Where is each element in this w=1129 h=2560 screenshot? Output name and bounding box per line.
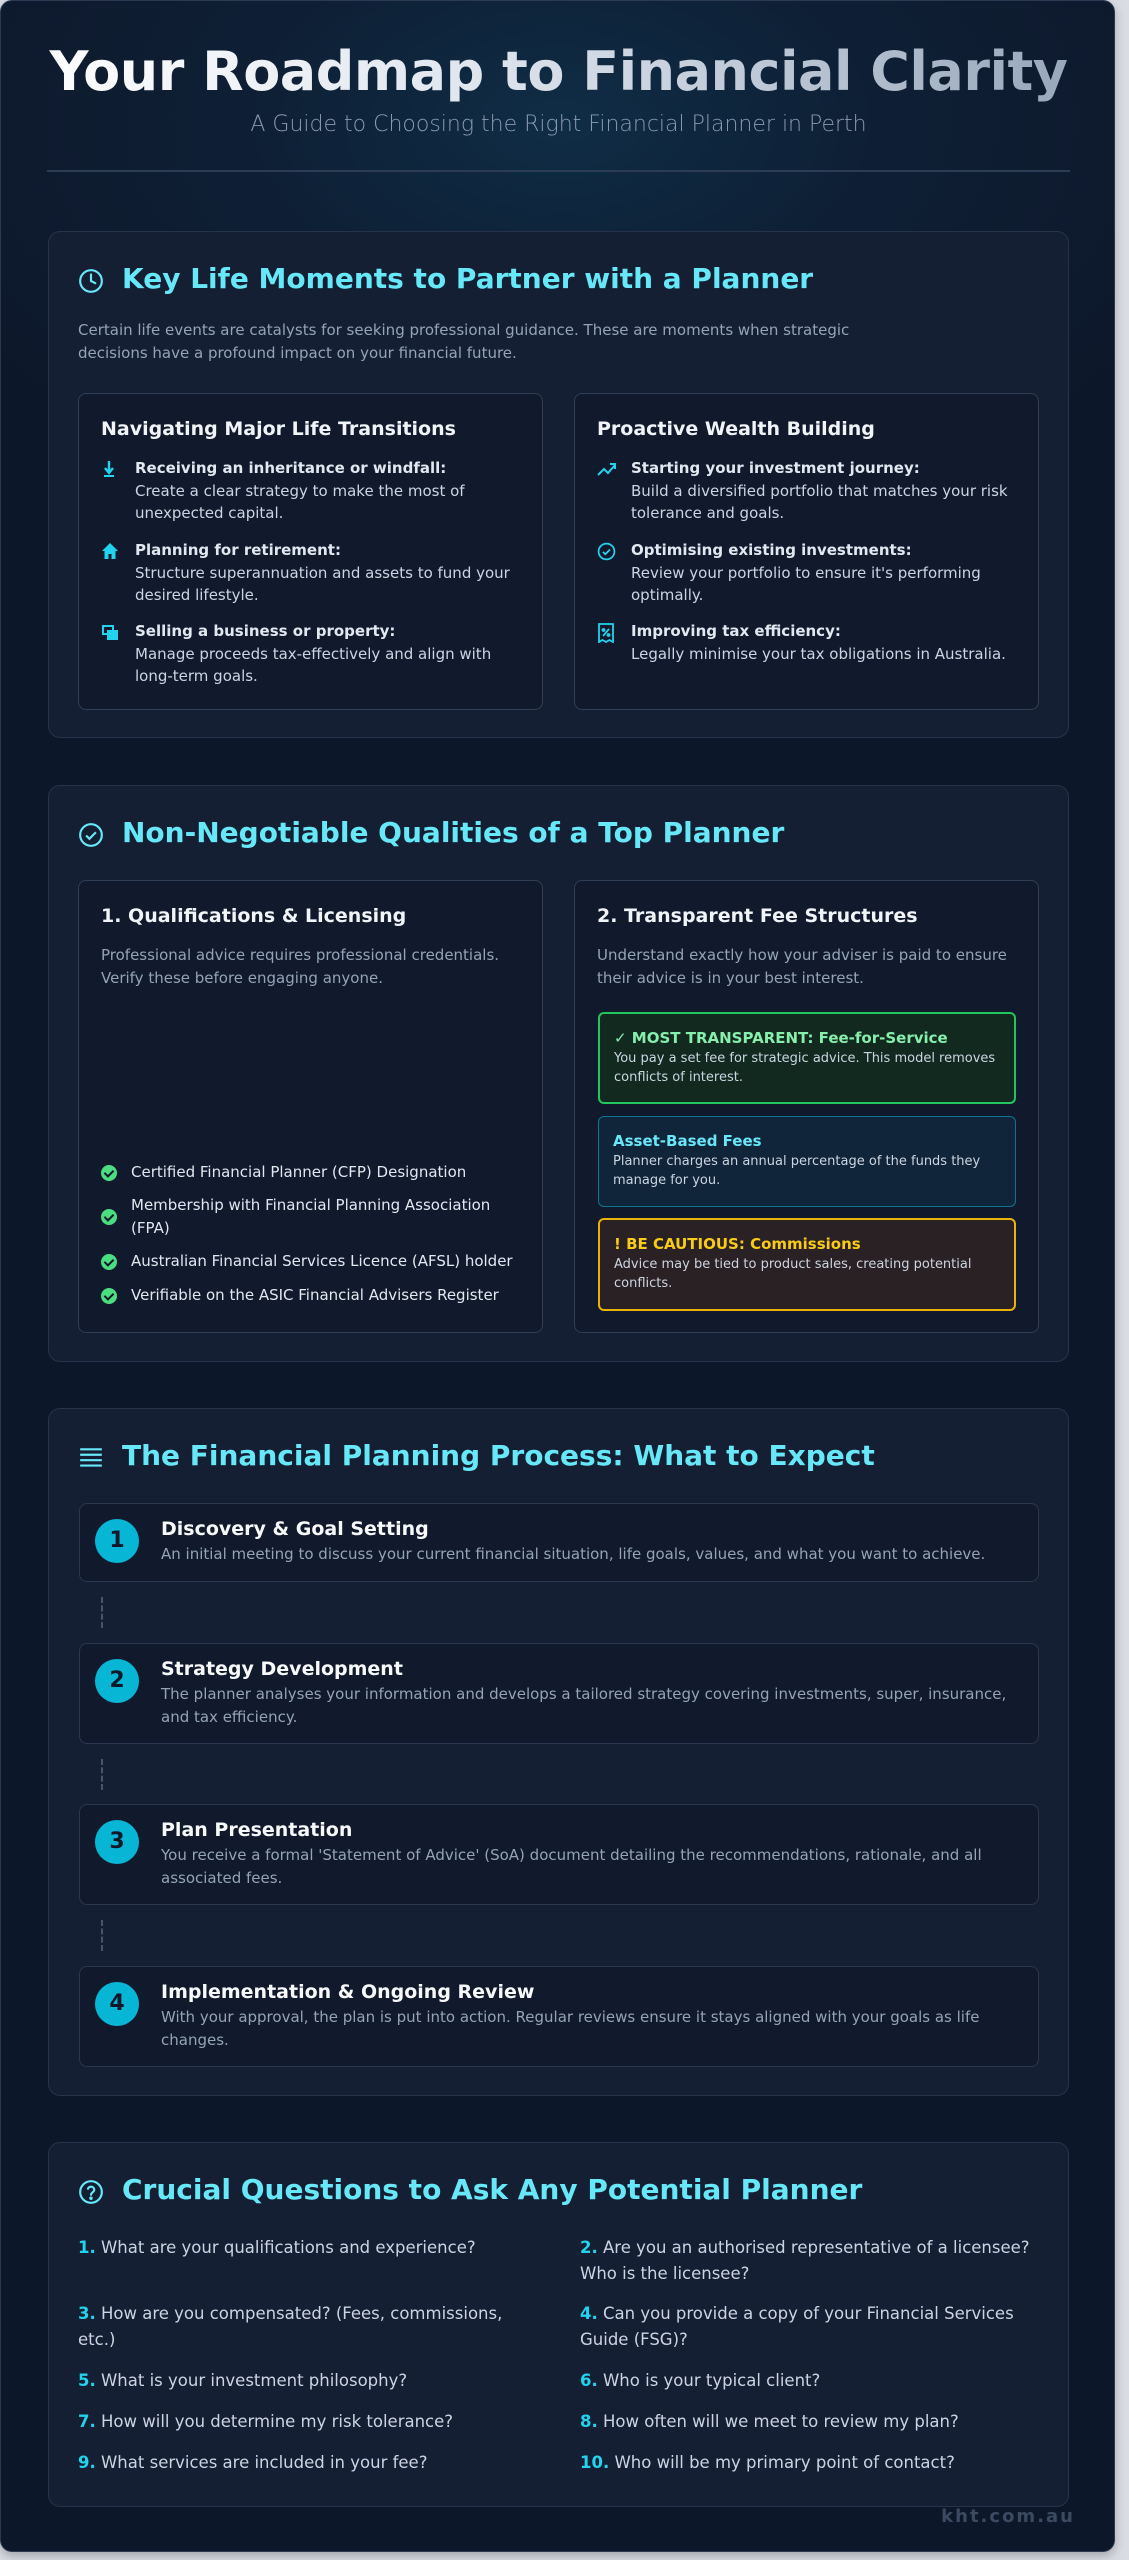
fee box: asset-based: Asset-Based Fees [613,1132,762,1150]
step 4: 4 [109,1991,125,2016]
questions list: 3. How are you compensated? (Fees, commissions, etc.) [78,2304,502,2349]
panel: key life moments: Key Life Moments to Partner with a Planner [122,262,813,295]
panel: planning process: The Financial Planning Process: What to Expect [122,1439,875,1472]
card title: Navigating Major Life Transitions [101,418,456,440]
item: retirement: Planning for retirement: [135,541,341,559]
item: retirement: Structure superannuation and assets to fund your desired lifestyle. [135,564,510,604]
questions list: 9. What services are included in your fee? [78,2453,427,2472]
questions list: 6. Who is your typical client? [580,2371,820,2390]
step 2 [79,1643,1039,1744]
subtitle: A Guide to Choosing the Right Financial Planner in Perth [250,112,867,137]
heading: questions [79,2173,862,2206]
fee box: asset-based [598,1116,1016,1207]
item: investment journey [597,459,1008,522]
step 1: Discovery & Goal Setting [161,1518,429,1540]
panel: questions [48,2142,1069,2507]
heading: process [80,1439,875,1472]
card: fee structures [574,880,1039,1333]
questions list: 10. Who will be my primary point of contact? [580,2453,955,2472]
item: inheritance: Receiving an inheritance or windfall: [135,459,446,477]
panel: qualities: Non-Negotiable Qualities of a Top Planner [122,816,784,849]
card title: 1. Qualifications & Licensing [101,905,406,927]
check item 3: Australian Financial Services Licence (AFSL) holder [131,1252,513,1270]
questions list: 8. How often will we meet to review my plan? [580,2412,959,2431]
intro text: Certain life events are catalysts for seeking professional guidance. These are moments when strategic decisions have a profound impact on your financial future. [78,321,849,362]
description: Understand exactly how your adviser is paid to ensure their advice is in your best interest. [597,946,1007,986]
panel: planning process [48,1408,1069,2096]
footer: source: kht.com.au [941,2506,1075,2527]
card: qualifications [78,880,543,1333]
fee box: fee-for-service: You pay a set fee for strategic advice. This model removes conflicts of interest. [614,1051,995,1085]
item: optimising [598,541,981,604]
panel: qualities [48,785,1069,1362]
heading: qualities [79,816,784,849]
questions list [78,2238,1030,2472]
description: Professional advice requires professional credentials. Verify these before engaging anyone. [101,946,499,986]
panel: questions: Crucial Questions to Ask Any Potential Planner [122,2173,862,2206]
card: life transitions [78,393,543,710]
item: selling business: Manage proceeds tax-effectively and align with long-term goals. [135,644,491,685]
step 1: An initial meeting to discuss your current financial situation, life goals, values, and what you want to achieve. [161,1545,985,1563]
step 3: Plan Presentation [161,1819,352,1841]
item: retirement [102,541,510,604]
questions list: 5. What is your investment philosophy? [78,2371,407,2390]
item: inheritance: Create a clear strategy to make the most of unexpected capital. [135,482,465,522]
title: Your Roadmap to Financial Clarity [50,40,1068,103]
item: inheritance [104,459,465,522]
questions list: 4. Can you provide a copy of your Financial Services Guide (FSG)? [580,2304,1014,2349]
item: tax efficiency: Legally minimise your tax obligations in Australia. [631,644,1006,662]
fee box: commissions: ! BE CAUTIOUS: Commissions [614,1235,861,1253]
fee box: fee-for-service [598,1012,1016,1104]
checklist [101,1163,513,1304]
questions list: 7. How will you determine my risk tolerance? [78,2412,453,2431]
step 4: Implementation & Ongoing Review [161,1981,534,2003]
step 1: 1 [109,1528,125,1553]
fee box: commissions [598,1218,1016,1311]
step 4 [79,1966,1039,2067]
step 3 [79,1804,1039,1905]
item: investment journey: Starting your investment journey: [631,459,920,477]
card title: 2. Transparent Fee Structures [597,905,918,927]
item: tax efficiency [598,622,1006,662]
step 1 [79,1503,1039,1582]
questions list: 1. What are your qualifications and experience? [78,2238,476,2257]
fee box: fee-for-service: ✓ MOST TRANSPARENT: Fee-for-Service [614,1029,948,1047]
card: wealth building [574,393,1039,710]
heading: key life moments [79,262,813,295]
step 2: The planner analyses your information and develops a tailored strategy covering investments, super, insurance, and tax efficiency. [161,1685,1006,1726]
step 2: 2 [109,1668,125,1693]
item: optimising: Optimising existing investments: [631,541,912,559]
check item 2: Membership with Financial Planning Association (FPA) [131,1196,490,1237]
step 4: With your approval, the plan is put into action. Regular reviews ensure it stays aligned with your goals as life changes. [161,2008,980,2048]
fee box: asset-based: Planner charges an annual percentage of the funds they manage for you. [613,1154,980,1188]
step 2: Strategy Development [161,1658,403,1680]
item: optimising: Review your portfolio to ensure it's performing optimally. [631,564,981,604]
card title: Proactive Wealth Building [597,418,875,440]
item: investment journey: Build a diversified portfolio that matches your risk tolerance and goals. [631,482,1008,522]
item: selling business [102,622,491,685]
questions list: 2. Are you an authorised representative of a licensee? Who is the licensee? [580,2238,1030,2283]
step 3: 3 [109,1829,125,1854]
step 3: You receive a formal 'Statement of Advice' (SoA) document detailing the recommendations, rationale, and all associated fees. [161,1846,982,1886]
panel: key life moments [48,231,1069,738]
item: tax efficiency: Improving tax efficiency: [631,622,841,640]
check item 4: Verifiable on the ASIC Financial Advisers Register [131,1286,499,1304]
check item 1: Certified Financial Planner (CFP) Designation [131,1163,466,1181]
fee box: commissions: Advice may be tied to product sales, creating potential conflicts. [614,1257,971,1291]
item: selling business: Selling a business or property: [135,622,395,640]
